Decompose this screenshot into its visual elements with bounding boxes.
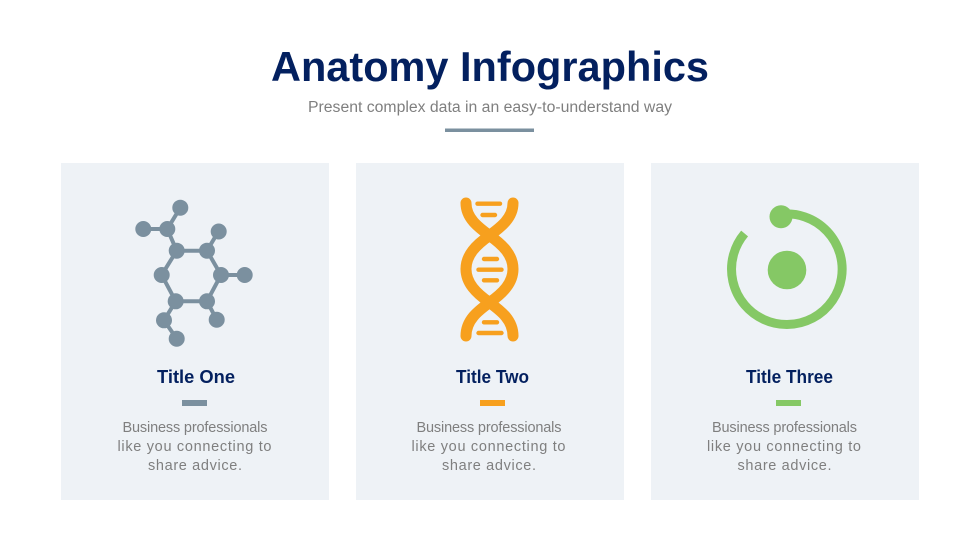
subtitle: Present complex data in an easy-to-understand way: [308, 99, 672, 116]
accent bar: [776, 400, 801, 406]
text block: like you connecting to: [707, 439, 861, 455]
panel: title two: [356, 163, 624, 500]
header rule: [445, 128, 534, 132]
text block: share advice.: [148, 458, 242, 474]
icon: orbit ring: [732, 205, 842, 324]
title: Anatomy Infographics: [271, 43, 709, 90]
text block: Business professionals: [122, 420, 268, 436]
panel: title one: [61, 163, 329, 500]
heading: title three: Title Three: [746, 367, 833, 387]
icon: dna helix: [466, 203, 513, 336]
heading: title one: Title One: [157, 367, 235, 387]
text block: like you connecting to: [118, 439, 272, 455]
text block: Business professionals: [712, 420, 857, 436]
accent bar: [480, 400, 505, 406]
accent bar: [182, 400, 207, 406]
icon: molecule: [135, 200, 253, 347]
text block: [707, 420, 861, 474]
heading: title two: Title Two: [456, 367, 529, 387]
text block: share advice.: [442, 458, 536, 474]
text block: [412, 420, 566, 474]
panel: title three: [651, 163, 919, 500]
text block: share advice.: [738, 458, 832, 474]
text block: Business professionals: [416, 420, 562, 436]
text block: like you connecting to: [412, 439, 566, 455]
text block: [118, 420, 272, 474]
